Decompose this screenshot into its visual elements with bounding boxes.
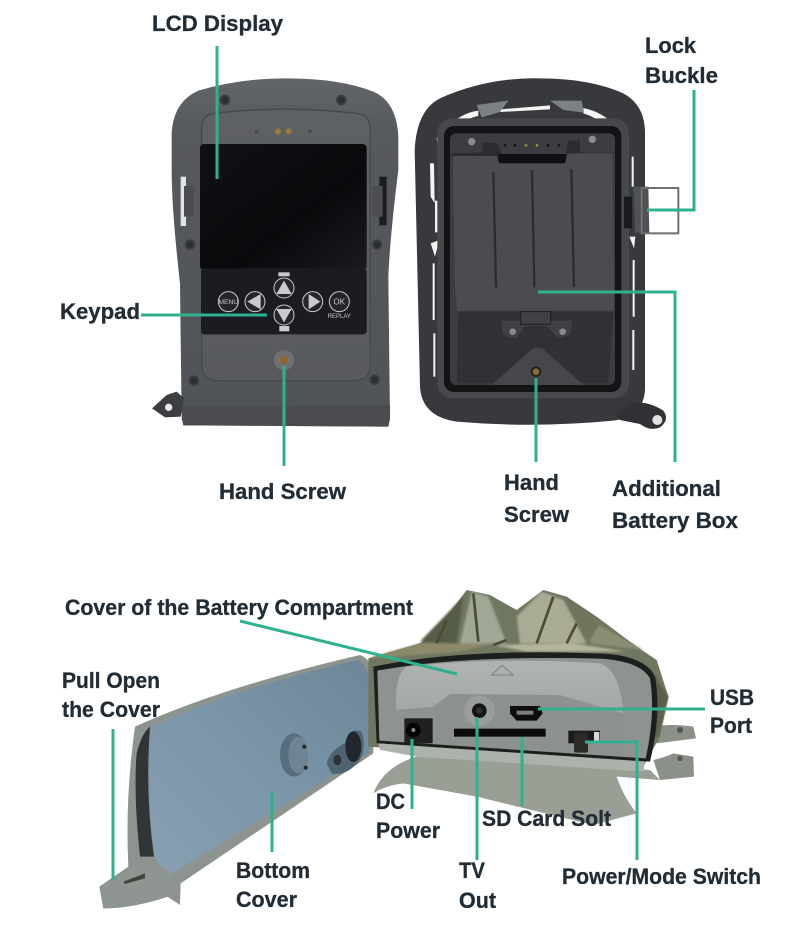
screws [186, 96, 381, 385]
camera body [172, 78, 398, 427]
leader line: Hand Screw right [534, 378, 538, 462]
inner housing [437, 118, 629, 398]
side latches [181, 177, 387, 226]
right tabs [653, 725, 696, 780]
DC power jack [404, 718, 433, 743]
bottom edge [182, 405, 390, 427]
label: USB Port [710, 685, 754, 738]
lower mount [373, 757, 660, 825]
panel: open bottom cover [99, 655, 373, 908]
top clips [477, 101, 584, 117]
label: Hand Screw right: Screw [504, 502, 569, 527]
label: Lock Buckle: Lock [645, 33, 696, 58]
label: DC Power: Power [376, 818, 440, 843]
leader line: DC Power [410, 739, 414, 809]
keypad plate [201, 268, 367, 334]
strap loop [152, 392, 184, 417]
label: Hand Screw right: Hand [504, 470, 559, 495]
label: USB Port: Port [710, 713, 752, 738]
indicator lights [255, 128, 312, 134]
strap loop [615, 403, 666, 429]
label: Pull Open the Cover [62, 668, 160, 722]
label: Additional Battery Box: Battery Box [612, 508, 738, 533]
camouflage top [368, 590, 668, 767]
label: LCD Display: LCD Display [152, 11, 283, 36]
leader line: Bottom Cover [270, 792, 274, 852]
pull tab [100, 867, 170, 908]
label: Pull Open the Cover: the Cover [62, 697, 160, 722]
battery cover [396, 661, 623, 713]
cover inner face [149, 660, 370, 877]
keypad plate: REPLAY [328, 314, 351, 320]
leader line: TV Out [476, 717, 478, 860]
label: Pull Open the Cover: Pull Open [62, 668, 160, 693]
label: Bottom Cover: Cover [236, 887, 297, 912]
cover outer shell [99, 655, 373, 908]
hinge knob [280, 733, 308, 777]
label: USB Port: USB [710, 685, 754, 710]
label: Additional Battery Box [612, 476, 738, 533]
label: TV Out [459, 858, 496, 913]
label: Lock Buckle [645, 33, 718, 88]
TV out jack [464, 695, 495, 726]
rubber frame [415, 78, 645, 425]
battery box lid [453, 153, 614, 311]
label: Keypad: Keypad [60, 299, 140, 324]
leader line: SD Card Slot [520, 737, 524, 806]
label: TV Out: Out [459, 888, 496, 913]
label: DC Power: DC [376, 789, 405, 814]
label: TV Out: TV [459, 858, 485, 883]
panel: camera rear with battery box [415, 78, 678, 429]
label: Bottom Cover: Bottom [236, 858, 310, 883]
lid ribs [493, 169, 574, 287]
leader line: USB Port [538, 708, 705, 710]
hand screw socket [274, 350, 294, 370]
label: SD Card Solt: SD Card Solt [482, 806, 611, 831]
label: Power/Mode Switch: Power/Mode Switch [562, 864, 761, 889]
label: DC Power [376, 789, 440, 843]
connector area [452, 136, 613, 163]
leader line: LCD Display [216, 46, 218, 179]
cover arrow mark [492, 665, 513, 675]
USB port [510, 706, 543, 721]
frame slots [430, 105, 635, 377]
label: Bottom Cover [236, 858, 310, 912]
SD card slot [454, 729, 546, 737]
leader line: Cover of the Battery Compartment [240, 621, 457, 674]
label: Cover of the Battery Compartment: Cover of the Battery Compartment [65, 595, 413, 620]
leader line: Pull Open the Cover [112, 729, 114, 880]
compartment rim [373, 652, 657, 762]
lower lip [378, 743, 645, 772]
keypad plate: OK [334, 298, 346, 307]
port plate [435, 694, 623, 755]
keyhole recess [327, 731, 364, 774]
compartment floor and screw mount [457, 312, 613, 385]
LCD screen [200, 144, 367, 270]
leader line: Power/Mode Switch [585, 742, 637, 860]
compartment interior [377, 658, 652, 758]
cover dark edge [136, 727, 154, 857]
label: Lock Buckle: Buckle [645, 63, 718, 88]
leader line: Lock Buckle [647, 90, 694, 210]
label: Hand Screw left: Hand Screw [219, 479, 346, 504]
panel: camera rear view with LCD and keypad [152, 78, 398, 427]
leader line: Hand Screw left [282, 366, 286, 466]
keypad plate: MENU [219, 299, 238, 306]
leader line: Additional Battery Box [538, 292, 675, 462]
panel: battery compartment body [368, 590, 696, 825]
lock buckle [624, 187, 678, 233]
power mode switch [568, 731, 600, 753]
inner panel [202, 109, 370, 381]
label: Hand Screw right [504, 470, 569, 527]
label: Additional Battery Box: Additional [612, 476, 721, 501]
leader line: Keypad [141, 314, 267, 316]
